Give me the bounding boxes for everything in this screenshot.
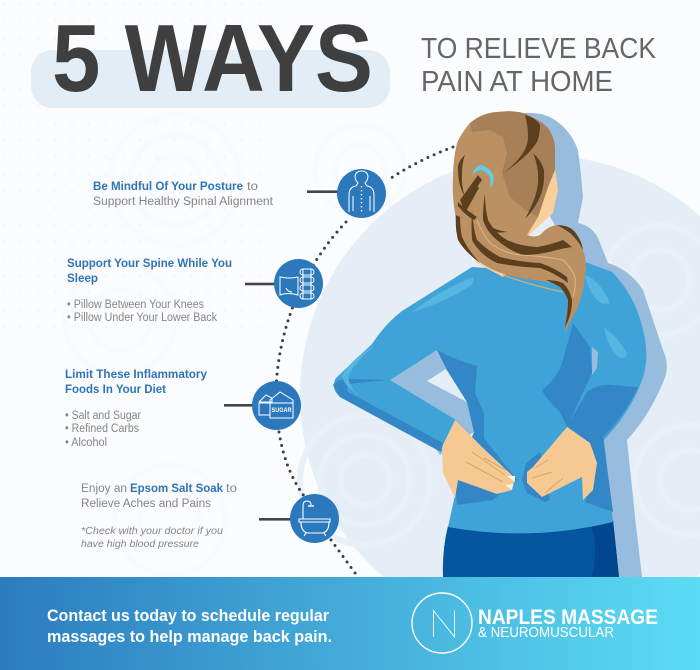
collar line — [503, 275, 563, 292]
text: epsom: have high blood pressure — [81, 538, 199, 550]
text: posture: Support Healthy Spinal Alignment — [93, 196, 274, 208]
icon: salt and sugar: SUGAR — [272, 408, 292, 414]
left hand — [442, 420, 515, 498]
right hand — [527, 427, 597, 500]
text: epsom: to — [226, 483, 237, 495]
text: epsom: *Check with your doctor if you — [81, 525, 223, 537]
neck and ear — [475, 168, 558, 277]
sweater — [334, 262, 646, 533]
logo: & NEUROMUSCULAR — [478, 625, 614, 641]
connector 4 — [259, 518, 291, 521]
connector 1 — [307, 190, 338, 193]
text: epsom — [81, 481, 237, 550]
text: diet: Foods In Your Diet — [65, 382, 166, 396]
text: spine: Support Your Spine While You — [67, 256, 232, 270]
text: epsom: Epsom Salt Soak — [130, 481, 223, 495]
sweater shading: left forearm — [333, 379, 443, 452]
sweater shading: right side — [542, 323, 592, 427]
pants — [443, 520, 619, 577]
hair tie — [472, 165, 494, 188]
icon: bathtub — [290, 494, 339, 543]
item 2: spine — [67, 256, 323, 324]
hair highlight — [477, 220, 575, 297]
text: spine — [67, 256, 232, 324]
connector 3 — [224, 404, 253, 407]
connector 2 — [245, 283, 275, 285]
subtitle — [421, 33, 657, 98]
text: spine: Sleep — [67, 271, 98, 285]
text: epsom: Relieve Aches and Pains — [81, 498, 211, 510]
title pill — [31, 50, 390, 108]
figure: woman holding her back — [333, 111, 667, 577]
hair strands — [456, 115, 583, 327]
gap between arm and torso — [427, 369, 467, 402]
figure shadow — [522, 113, 667, 577]
icon: pillow and spine — [274, 259, 323, 308]
item 1: posture — [93, 169, 386, 218]
footer call to action: massages to help manage back pain. — [47, 628, 332, 646]
text: posture: Be Mindful Of Your Posture — [93, 179, 243, 193]
text: diet: • Alcohol — [65, 437, 107, 449]
footer call to action — [47, 607, 332, 646]
text: diet: • Salt and Sugar — [65, 410, 141, 422]
text: posture: to — [247, 181, 258, 193]
sweater shading: left side — [437, 350, 517, 505]
text: diet: Limit These Inflammatory — [65, 367, 207, 381]
logo: NAPLES MASSAGE — [478, 606, 658, 629]
logo — [412, 593, 658, 653]
text: epsom: Enjoy an — [81, 483, 127, 495]
text: posture — [93, 179, 274, 208]
footer banner — [0, 577, 700, 670]
footer call to action: Contact us today to schedule regular — [47, 607, 330, 625]
sleeve gap — [592, 347, 598, 375]
dotted arc connector — [276, 147, 453, 577]
text: spine: • Pillow Under Your Lower Back — [67, 312, 217, 324]
text: diet — [65, 367, 207, 449]
icon: salt and sugar — [252, 381, 301, 430]
text: diet: • Refined Carbs — [65, 423, 139, 435]
shadow around fingers — [522, 452, 550, 502]
shadow between arm and torso — [388, 350, 474, 455]
sweater shading: right forearm — [567, 385, 638, 512]
pale circle behind figure — [297, 158, 700, 577]
hair — [453, 111, 586, 332]
item 4: epsom salt soak — [81, 481, 339, 550]
sweater highlights — [342, 275, 627, 397]
text: spine: • Pillow Between Your Knees — [67, 299, 204, 311]
title: 5 WAYS: 5 WAYS — [52, 5, 373, 112]
item 3: diet — [65, 367, 301, 449]
hair crown shade — [470, 111, 555, 217]
icon: posture body — [337, 169, 386, 218]
pants shading — [592, 520, 619, 577]
subtitle: PAIN AT HOME — [421, 66, 613, 98]
subtitle: TO RELIEVE BACK — [421, 33, 657, 65]
